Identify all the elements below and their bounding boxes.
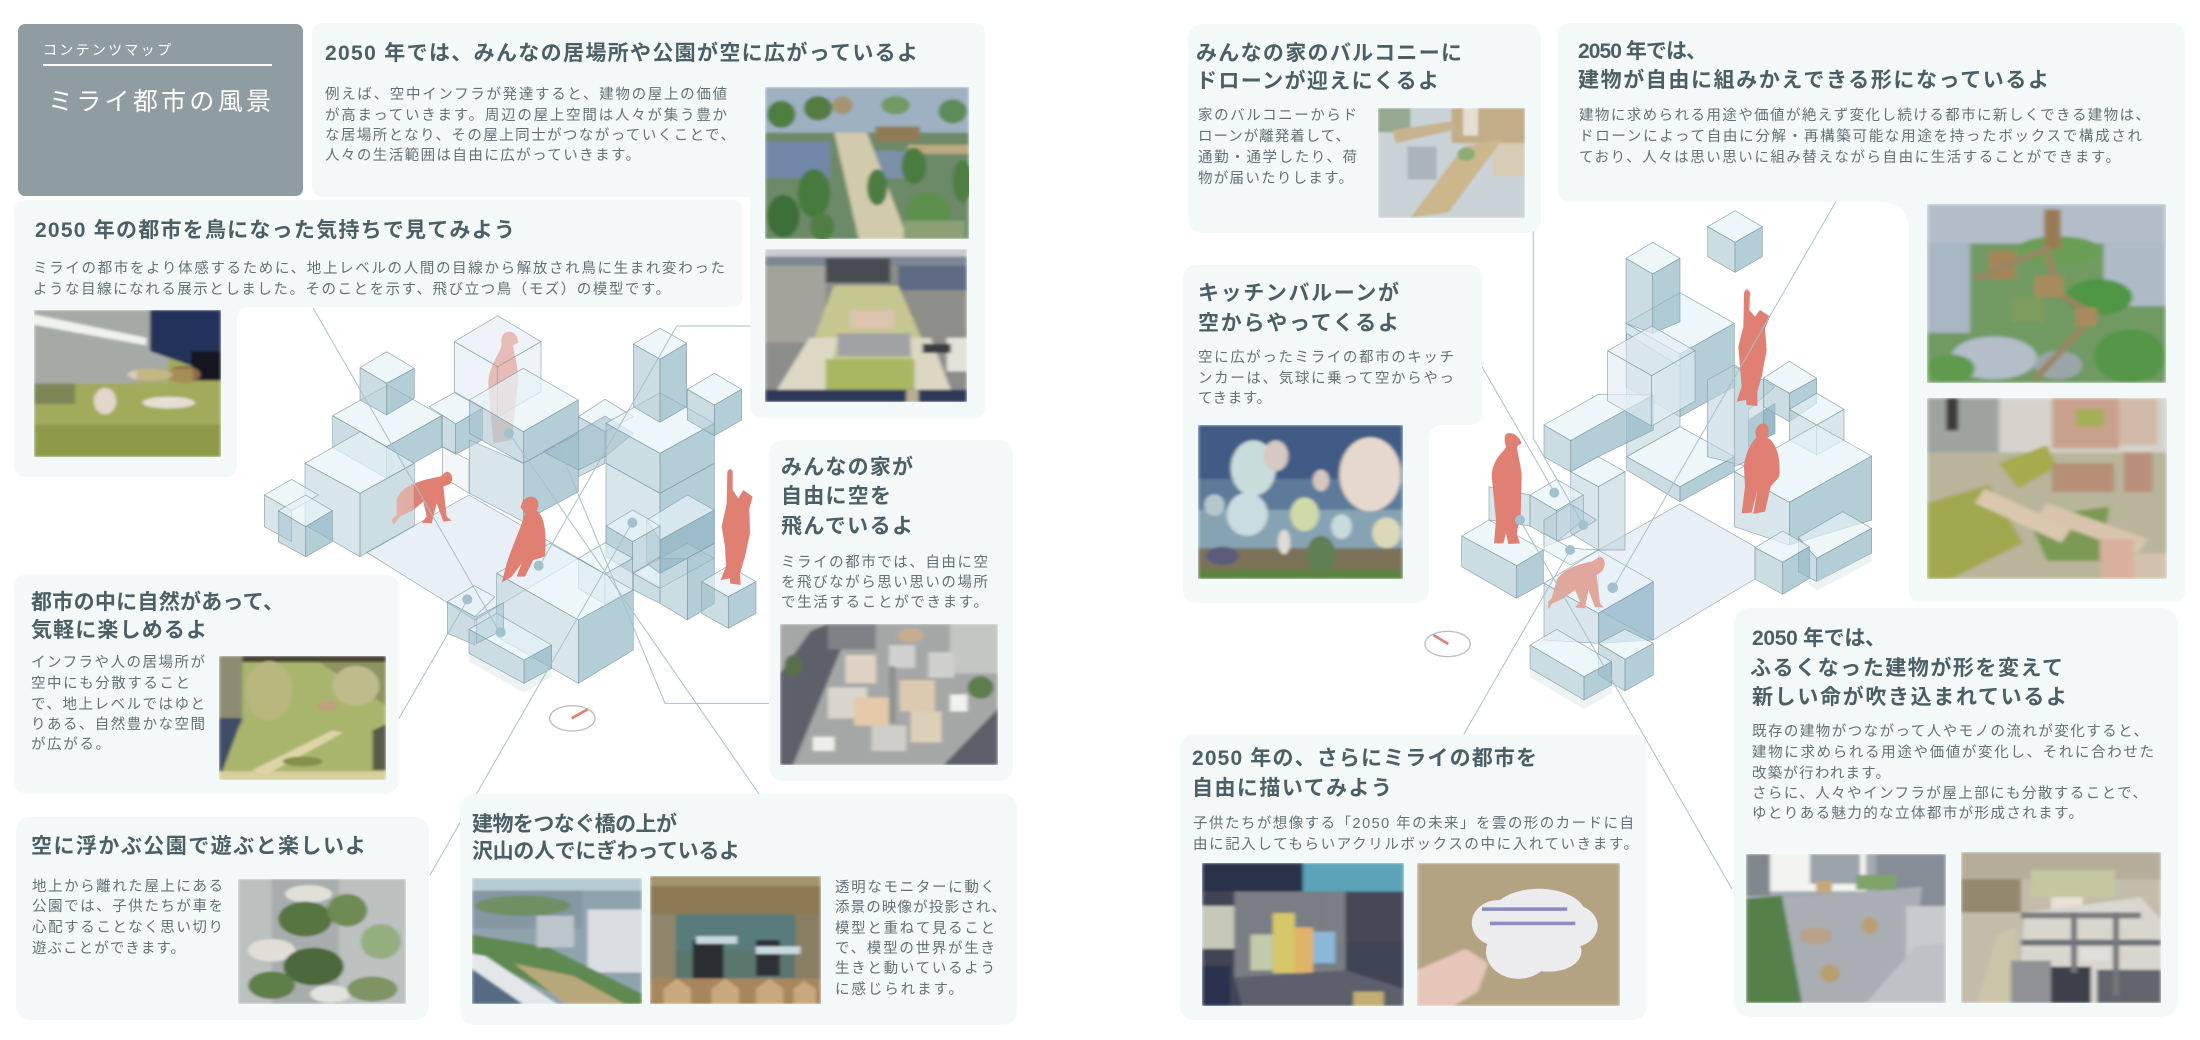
title: ミライ都市の風景 xyxy=(48,88,271,116)
text block: 既存の建物がつながって人やモノの流れが変化すると、 xyxy=(1752,723,2148,740)
panel: bridges between buildings xyxy=(460,794,1017,1025)
callout lines and anchor dots xyxy=(1463,193,1841,889)
text block: 人々の生活範囲は自由に広がっていきます。 xyxy=(325,146,640,164)
text block: ゆとりある魅力的な立体都市が形成されます。 xyxy=(1752,805,2083,822)
photo: acrylic box xyxy=(1202,863,1404,1006)
photo: bird model xyxy=(34,310,221,457)
heading: 建物が自由に組みかえできる形になっているよ xyxy=(1578,68,2049,92)
text block: 地上から離れた屋上にある xyxy=(32,878,223,895)
text block: 子供たちが想像する「2050 年の未来」を雲の形のカードに自 xyxy=(1193,815,1634,832)
person: figure with raised arm xyxy=(1737,289,1770,406)
panel: draw the future city xyxy=(1180,734,1647,1020)
heading: 建物をつなぐ橋の上が xyxy=(472,812,677,836)
panel: reconfigurable buildings xyxy=(1558,23,2185,602)
text block: が広がる。 xyxy=(31,736,110,753)
person: standing figure inside cube xyxy=(488,332,518,443)
heading: 気軽に楽しめるよ xyxy=(31,619,207,642)
text block: 例えば、空中インフラが発達すると、建物の屋上の価値 xyxy=(325,86,727,103)
heading: ドローンが迎えにくるよ xyxy=(1196,69,1439,93)
text block: 通勤・通学したり、荷 xyxy=(1198,149,1357,166)
text block: 透明なモニターに動く xyxy=(835,879,995,896)
photo: cloud card in hand xyxy=(1417,863,1620,1006)
heading: 空に浮かぶ公園で遊ぶと楽しいよ xyxy=(31,834,366,858)
text block xyxy=(325,86,735,164)
isometric diagram: left city model xyxy=(264,308,770,875)
text block: 建物に求められる用途や価値が変化し、それに合わせた xyxy=(1752,744,2154,761)
heading: 自由に空を xyxy=(781,485,891,508)
person: figure with raised arm xyxy=(721,469,753,585)
text block: 由に記入してもらいアクリルボックスの中に入れていきます。 xyxy=(1193,836,1638,853)
text block: に感じられます。 xyxy=(835,981,963,998)
panel: kitchen balloon xyxy=(1183,265,1482,603)
photo: balcony render xyxy=(1378,108,1525,218)
person: crawling child xyxy=(392,472,452,525)
heading xyxy=(1578,40,2049,92)
label: contents map: コンテンツマップ xyxy=(43,42,171,58)
text block: 物が届いたりします。 xyxy=(1198,170,1353,187)
text block xyxy=(32,878,223,957)
text block: 模型と重ねて見ること xyxy=(835,920,995,937)
heading: ふるくなった建物が形を変えて xyxy=(1750,656,2063,680)
photo: renovated building model xyxy=(1961,852,2161,1003)
text block: 公園では、子供たちが車を xyxy=(32,898,223,915)
heading xyxy=(1198,281,1399,335)
panel: title box xyxy=(18,24,303,196)
photo: rooftop park model xyxy=(765,249,967,402)
text block: りある、自然豊かな空間 xyxy=(31,716,205,733)
text block xyxy=(835,879,1006,998)
heading xyxy=(1750,627,2067,709)
icon: compass xyxy=(550,706,595,731)
text block: てきます。 xyxy=(1198,390,1271,407)
text block: 空中にも分散すること xyxy=(31,675,190,692)
photo: floating park render xyxy=(238,879,406,1004)
text block: ミライの都市では、自由に空 xyxy=(781,554,988,571)
photo: green model xyxy=(219,656,386,780)
text block: が高まっていきます。周辺の屋上空間は人々が集う豊か xyxy=(325,107,727,124)
photo: transparent monitor exhibit xyxy=(650,876,821,1004)
text block: で、地上レベルではゆと xyxy=(31,696,205,713)
photo: bridge render xyxy=(472,878,642,1004)
heading: 沢山の人でにぎわっているよ xyxy=(472,839,740,863)
heading: 新しい命が吹き込まれているよ xyxy=(1752,685,2067,709)
panel: floating park xyxy=(16,817,429,1020)
text block: 添景の映像が投影され、 xyxy=(835,899,1006,916)
text block: ンカーは、気球に乗って空からやっ xyxy=(1198,370,1454,387)
text block: ような目線になれる展示としました。そのことを示す、飛び立つ鳥（モズ）の模型です。 xyxy=(33,281,670,298)
photo: flying houses render xyxy=(780,624,998,765)
text block xyxy=(31,654,206,753)
text block: ミライの都市をより体感するために、地上レベルの人間の目線から解放され鳥に生まれ変わった xyxy=(33,260,725,277)
callout lines and anchor dots xyxy=(313,308,770,875)
icon: compass xyxy=(1425,631,1470,657)
person: standing figure xyxy=(1742,423,1780,514)
text block: 遊ぶことができます。 xyxy=(32,940,185,957)
heading: キッチンバルーンが xyxy=(1198,281,1399,305)
text block xyxy=(1198,349,1454,407)
person: seated figure xyxy=(502,497,546,583)
text block xyxy=(1579,107,2150,166)
heading: みんなの家が xyxy=(781,455,913,479)
heading: 飛んでいるよ xyxy=(781,515,913,538)
text block: ローンが離発着して、 xyxy=(1198,128,1350,145)
heading: 2050 年では、みんなの居場所や公園が空に広がっているよ xyxy=(325,41,918,65)
heading: 2050 年では、 xyxy=(1578,40,1707,63)
heading: 2050 年では、 xyxy=(1752,627,1886,650)
heading: 2050 年の、さらにミライの都市を xyxy=(1192,747,1537,770)
text block: 生きと動いているよう xyxy=(835,960,995,977)
isometric diagram: right city model xyxy=(1425,193,1872,889)
text block: ており、人々は思い思いに組み替えながら自由に生活することができます。 xyxy=(1579,149,2120,166)
text block: 改築が行われます。 xyxy=(1752,764,1890,782)
text block: インフラや人の居場所が xyxy=(31,654,206,671)
text block xyxy=(1198,107,1357,187)
photo: renovated building render xyxy=(1746,854,1946,1003)
text block: で、模型の世界が生き xyxy=(835,940,995,957)
heading: 自由に描いてみよう xyxy=(1192,777,1392,800)
text block: ドローンによって自由に分解・再構築可能な用途を持ったボックスで構成され xyxy=(1579,127,2142,145)
text block: 心配することなく思い切り xyxy=(32,919,223,936)
text block: さらに、人々やインフラが屋上部にも分散することで、 xyxy=(1752,785,2147,802)
heading xyxy=(472,812,740,863)
panel: rooftop parks xyxy=(312,23,985,418)
text block: で生活することができます。 xyxy=(781,594,988,611)
text block xyxy=(1193,815,1638,853)
heading: 2050 年の都市を鳥になった気持ちで見てみよう xyxy=(35,219,515,242)
text block xyxy=(781,554,988,611)
panel: renovated buildings xyxy=(1734,608,2178,1017)
panel: bird's eye view xyxy=(14,200,743,477)
photo: modular building model xyxy=(1927,398,2167,579)
heading xyxy=(781,455,913,538)
text block xyxy=(33,260,725,298)
text block: 建物に求められる用途や価値が絶えず変化し続ける都市に新しくできる建物は、 xyxy=(1579,107,2150,124)
heading: 都市の中に自然があって、 xyxy=(31,590,284,614)
text block: 空に広がったミライの都市のキッチ xyxy=(1198,349,1454,366)
heading xyxy=(1196,42,1462,93)
text block: な居場所となり、その屋上同士がつながっていくことで、 xyxy=(325,127,735,144)
text block: を飛びながら思い思いの場所 xyxy=(781,574,988,591)
panel: flying homes xyxy=(769,440,1013,781)
photo: modular building render xyxy=(1927,204,2166,383)
text block: 家のバルコニーからド xyxy=(1198,107,1357,124)
heading xyxy=(1192,747,1537,800)
text block xyxy=(1752,723,2154,822)
photo: rooftop city render xyxy=(765,87,969,239)
photo: kitchen balloons xyxy=(1198,425,1403,579)
panel: drones at balconies xyxy=(1188,24,1541,233)
heading xyxy=(31,590,284,642)
panel: nature in the city xyxy=(14,574,399,794)
person: crawling child xyxy=(1548,557,1605,609)
person: standing figure with cap xyxy=(1492,433,1522,544)
heading: みんなの家のバルコニーに xyxy=(1196,42,1462,65)
heading: 空からやってくるよ xyxy=(1198,312,1399,335)
